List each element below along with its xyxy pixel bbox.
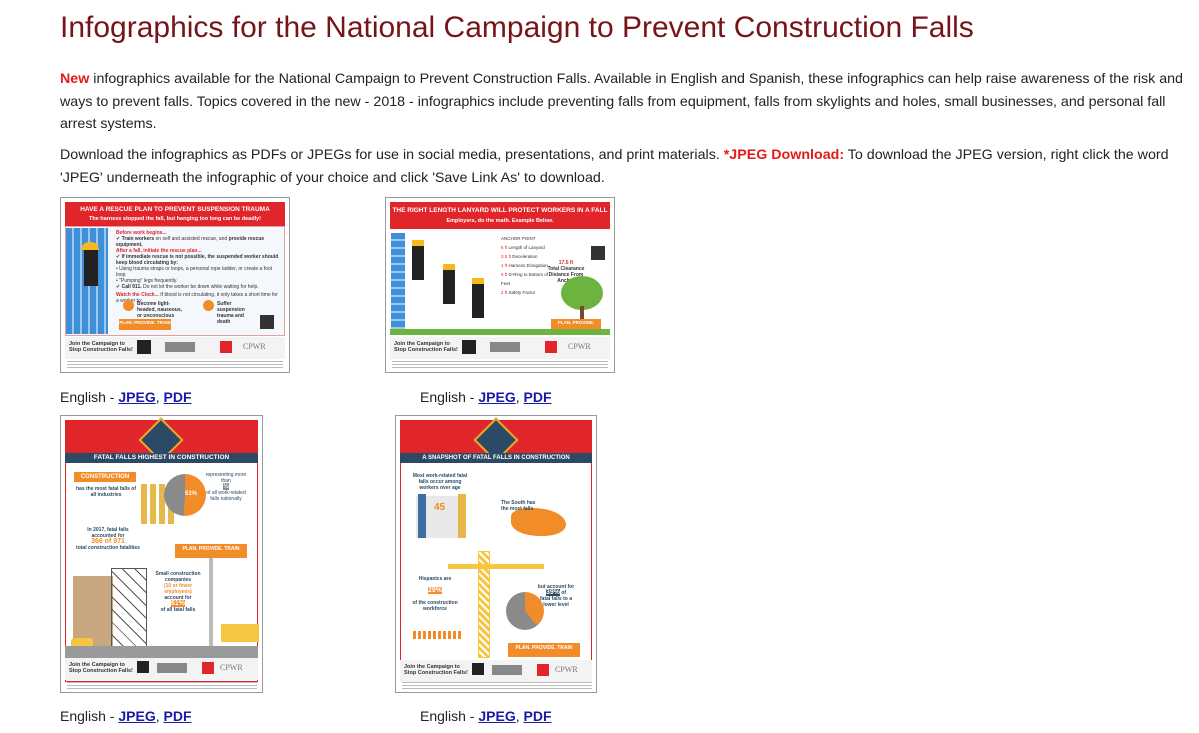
plan provide train: PLAN. PROVIDE. TRAIN xyxy=(558,320,594,333)
hispanics stat xyxy=(412,576,458,612)
ground xyxy=(390,329,610,335)
thumbnail: suspension trauma xyxy=(60,197,290,373)
small companies: 61% xyxy=(171,600,185,607)
diamond logo xyxy=(138,417,184,463)
workers xyxy=(412,240,424,280)
thumbnail: snapshot of fatal falls: fatal falls to a lower level xyxy=(540,596,572,608)
footer xyxy=(65,658,258,680)
pie chart xyxy=(164,474,206,516)
red header xyxy=(65,420,258,456)
small companies: of all fatal falls xyxy=(161,607,195,613)
rescue steps text: ✔ If immediate rescue is not possible, the suspended worker should keep blood circulating by: xyxy=(116,254,278,266)
footer: Stop Construction Falls! xyxy=(69,347,133,353)
footer: CPWR xyxy=(555,665,578,674)
rescue steps text xyxy=(116,230,278,290)
366 of 971: total construction fatalities xyxy=(76,545,140,551)
small companies: Small construction companies xyxy=(155,571,200,583)
footer: CPWR xyxy=(220,663,243,672)
footer: Join the Campaign to xyxy=(69,662,125,668)
measurements: ANCHOR POINT xyxy=(501,236,536,241)
plan provide train xyxy=(175,544,247,558)
plan provide train xyxy=(508,643,580,657)
small companies: account for xyxy=(164,595,192,601)
thumbnail: fatal falls highest: has the most fatal falls of all industries xyxy=(76,486,136,498)
red header xyxy=(400,420,592,456)
thumbnail: lanyard: 17.5 ft xyxy=(559,260,573,266)
footer: Stop Construction Falls! xyxy=(69,668,133,674)
thumbnail: fatal falls highest xyxy=(60,415,263,693)
header banner: THE RIGHT LENGTH LANYARD WILL PROTECT WORKERS IN A FALL xyxy=(392,207,608,214)
thumbnail: lanyard: Total Clearance Distance From Anchor xyxy=(548,266,584,284)
pie 39% xyxy=(506,592,544,630)
building illustration xyxy=(66,228,108,334)
caption 2: English - JPEG, PDF xyxy=(420,389,552,405)
measurements: 6 ft Length of Lanyard xyxy=(501,245,545,250)
intro paragraph: New infographics available for the National Campaign to Prevent Construction Falls. Available in English and Spanish, these infographics can help raise awareness of the risk and ways to prevent falls. Topics covered in the new - 2018 - infographics include preventing falls from equipment, falls from skylights and holes, small businesses, and personal fall arrest systems. xyxy=(60,71,1183,132)
hispanics stat: 29% xyxy=(428,587,442,594)
plan provide train: PLAN. PROVIDE. TRAIN xyxy=(183,546,239,552)
measurements xyxy=(501,236,548,295)
thumbnail: suspension trauma: Suffer suspension trauma and death xyxy=(217,301,245,325)
rescue steps text: ✔ Train workers on self and assisted rescue, and provide rescue equipment. xyxy=(116,236,264,248)
header banner: HAVE A RESCUE PLAN TO PREVENT SUSPENSION TRAUMA xyxy=(80,206,270,213)
thumbnail: suspension trauma: Become light-headed, nauseous, or unconscious xyxy=(137,301,182,319)
building xyxy=(391,233,405,333)
thumbnail: lanyard xyxy=(385,197,615,373)
caption 3: English - JPEG, PDF xyxy=(60,708,192,724)
measurements: 3.5 ft Deceleration xyxy=(501,254,538,259)
title bar: FATAL FALLS HIGHEST IN CONSTRUCTION xyxy=(94,454,229,461)
house with scaffold xyxy=(73,576,113,646)
measurements: 5 ft D-Ring to Bottom of Feet xyxy=(501,272,548,286)
footer: Join the Campaign to xyxy=(394,341,450,347)
366 of 971 xyxy=(76,527,140,551)
hispanics stat: of the construction workforce xyxy=(412,600,458,612)
red frame xyxy=(400,420,592,682)
thumbnail: snapshot of fatal falls: 45 xyxy=(434,502,445,513)
366 of 971: 366 of 971 xyxy=(91,538,125,545)
plan provide train: PLAN. PROVIDE. TRAIN xyxy=(119,320,171,325)
plan provide train xyxy=(551,319,601,329)
title bar: A SNAPSHOT OF FATAL FALLS IN CONSTRUCTION xyxy=(422,455,570,461)
thumbnail: fatal falls highest: ½ xyxy=(223,483,229,490)
age 45: Most work-related fatal falls occur among workers over age xyxy=(413,473,467,491)
thumbnail: fatal falls highest: representing more than xyxy=(206,472,246,484)
hispanics stat: Hispanics are xyxy=(419,576,451,582)
watch the clock: Watch the Clock... If blood is not circulating, it only takes a short time for a worker to: xyxy=(116,292,278,304)
tree xyxy=(561,276,603,310)
background panel xyxy=(65,226,285,336)
worker icon xyxy=(81,242,99,250)
header banner: The harness stopped the fall, but hanging too long can be deadly! xyxy=(89,216,261,222)
title: Infographics for the National Campaign to Prevent Construction Falls xyxy=(60,11,974,44)
small companies xyxy=(155,571,200,613)
measurements: 1 ft Harness Elongation xyxy=(501,263,548,268)
thumbnail: snapshot of fatal falls xyxy=(395,415,597,693)
header banner: Employers, do the math. Example Below. xyxy=(446,218,554,224)
diamond logo xyxy=(473,417,519,463)
rescue steps text: ✔ Call 911. Do not let the worker be down while waiting for help. xyxy=(116,284,259,290)
bulldozer xyxy=(71,638,93,650)
caption 4: English - JPEG, PDF xyxy=(420,708,552,724)
pole xyxy=(209,558,213,648)
caption 1: English - JPEG, PDF xyxy=(60,389,192,405)
footer: Join the Campaign to xyxy=(69,341,125,347)
US map xyxy=(511,508,566,536)
QR code xyxy=(260,315,274,329)
QR xyxy=(591,246,605,260)
measurements: 2 ft Safety Factor xyxy=(501,290,535,295)
header banner xyxy=(65,202,285,226)
thumbnail: snapshot of fatal falls: The South has the most falls xyxy=(501,500,535,512)
truck xyxy=(221,624,259,642)
rescue steps text: • Using trauma straps or loops, a personal rope ladder, or create a foot loop xyxy=(116,266,272,278)
footer: CPWR xyxy=(568,342,591,351)
footer xyxy=(400,660,592,682)
footer: Stop Construction Falls! xyxy=(394,347,458,353)
plan provide train: PLAN. PROVIDE. TRAIN xyxy=(516,645,572,651)
crane xyxy=(478,551,490,658)
thumbnail: snapshot of fatal falls: but account for xyxy=(538,584,574,590)
small companies: (10 or fewer employees) xyxy=(164,583,192,595)
footer: Join the Campaign to xyxy=(404,664,460,670)
footer xyxy=(65,337,285,359)
thumbnail: fatal falls highest: 51% xyxy=(185,491,197,497)
footer: CPWR xyxy=(243,342,266,351)
construction label xyxy=(74,472,136,482)
rescue steps text: After a fall, initiate the rescue plan... xyxy=(116,248,202,254)
workers xyxy=(141,484,175,524)
thumbnail: fatal falls highest: of all work-related falls nationally xyxy=(206,490,246,502)
plan provide train xyxy=(119,319,171,330)
rescue steps text: • "Pumping" legs frequently. xyxy=(116,278,177,284)
366 of 971: In 2017, fatal falls accounted for xyxy=(87,527,129,539)
footer xyxy=(390,337,610,359)
rescue steps text: Before work begins... xyxy=(116,230,167,236)
footer: Stop Construction Falls! xyxy=(404,670,468,676)
title bar xyxy=(65,453,258,463)
header banner xyxy=(390,202,610,229)
ground xyxy=(65,646,258,658)
download paragraph: Download the infographics as PDFs or JPEGs for use in social media, presentations, and print materials. *JPEG Download: To download the JPEG version, right click the word 'JPEG' underneath the infographic of your choice and click 'Save Link As' to download. xyxy=(60,147,1169,186)
title bar xyxy=(400,453,592,463)
thumbnail: snapshot of fatal falls: 39% of xyxy=(546,589,566,596)
red frame xyxy=(65,420,258,682)
construction label: CONSTRUCTION xyxy=(81,474,129,480)
